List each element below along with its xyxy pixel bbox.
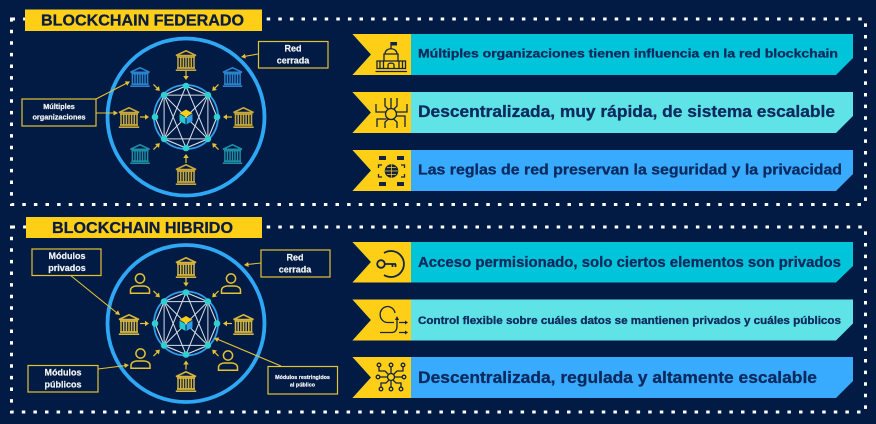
callout: múltiples organizaciones: organizaciones	[32, 112, 86, 122]
heading: blockchain hibrido	[26, 217, 262, 238]
callout: módulos privados: Módulos	[48, 251, 86, 261]
central blockchain hub	[152, 83, 220, 151]
organisation icons	[119, 51, 254, 184]
central blockchain hub	[152, 289, 220, 358]
closed network ring	[108, 38, 264, 196]
callout: módulos restringidos: al público	[290, 382, 316, 388]
callout: módulos restringidos	[213, 336, 338, 394]
icon: globe and servers	[378, 156, 404, 186]
inward arrows	[140, 278, 232, 370]
icon: key	[377, 251, 404, 277]
banner: reglas de red	[352, 150, 853, 191]
heading: blockchain hibrido: BLOCKCHAIN HIBRIDO	[52, 220, 233, 237]
banner: descentralizada regulada: Descentralizada, regulada y altamente escalable	[418, 368, 817, 387]
icon: flow arrows	[380, 307, 408, 334]
panel: blockchain federado	[12, 10, 866, 204]
banner: múltiples organizaciones: Múltiples organizaciones tienen influencia en la red blockchain	[418, 46, 838, 60]
banner: control flexible	[352, 300, 853, 340]
callout: módulos públicos: Módulos	[44, 368, 82, 378]
callout: múltiples organizaciones: Múltiples	[43, 102, 75, 111]
inward arrows	[140, 71, 232, 163]
private module icons	[119, 258, 254, 391]
banner: acceso permisionado	[352, 242, 853, 282]
network diagram: hibrido	[108, 245, 264, 402]
banner: control flexible: Control flexible sobre cuáles datos se mantienen privados y cuáles públicos	[418, 315, 841, 327]
callout: red cerrada	[244, 250, 330, 277]
callout: múltiples organizaciones	[22, 79, 131, 126]
heading: blockchain federado: BLOCKCHAIN FEDERADO	[41, 12, 244, 30]
heading: blockchain federado	[25, 10, 262, 31]
banner: descentralizada rápida	[352, 92, 853, 133]
icon: network nodes	[376, 363, 406, 391]
callout: módulos privados	[32, 249, 122, 317]
banner: acceso permisionado: Acceso permisionado, solo ciertos elementos son privados	[418, 255, 841, 271]
closed network ring	[108, 245, 264, 402]
callout: red cerrada: Red	[286, 252, 304, 262]
banner: descentralizada regulada	[352, 357, 853, 398]
public module icons	[130, 274, 240, 370]
callout: módulos restringidos: Módulos restringidos	[275, 375, 330, 381]
network diagram: federado	[108, 38, 264, 196]
callout: módulos públicos: públicos	[44, 380, 82, 390]
callout: red cerrada: cerrada	[277, 56, 310, 66]
callout: red cerrada	[241, 42, 328, 68]
callout: red cerrada: cerrada	[279, 264, 312, 274]
banner: reglas de red: Las reglas de red preservan la seguridad y la privacidad	[418, 162, 842, 178]
callout: red cerrada: Red	[284, 44, 302, 54]
icon: capitol building	[376, 42, 407, 72]
banner: múltiples organizaciones	[352, 34, 853, 75]
icon: circuit	[376, 98, 407, 128]
banner: descentralizada rápida: Descentralizada, muy rápida, de sistema escalable	[418, 103, 835, 121]
callout: módulos privados: privados	[48, 263, 86, 273]
panel: blockchain hibrido	[12, 217, 866, 412]
callout: módulos públicos	[28, 363, 129, 392]
